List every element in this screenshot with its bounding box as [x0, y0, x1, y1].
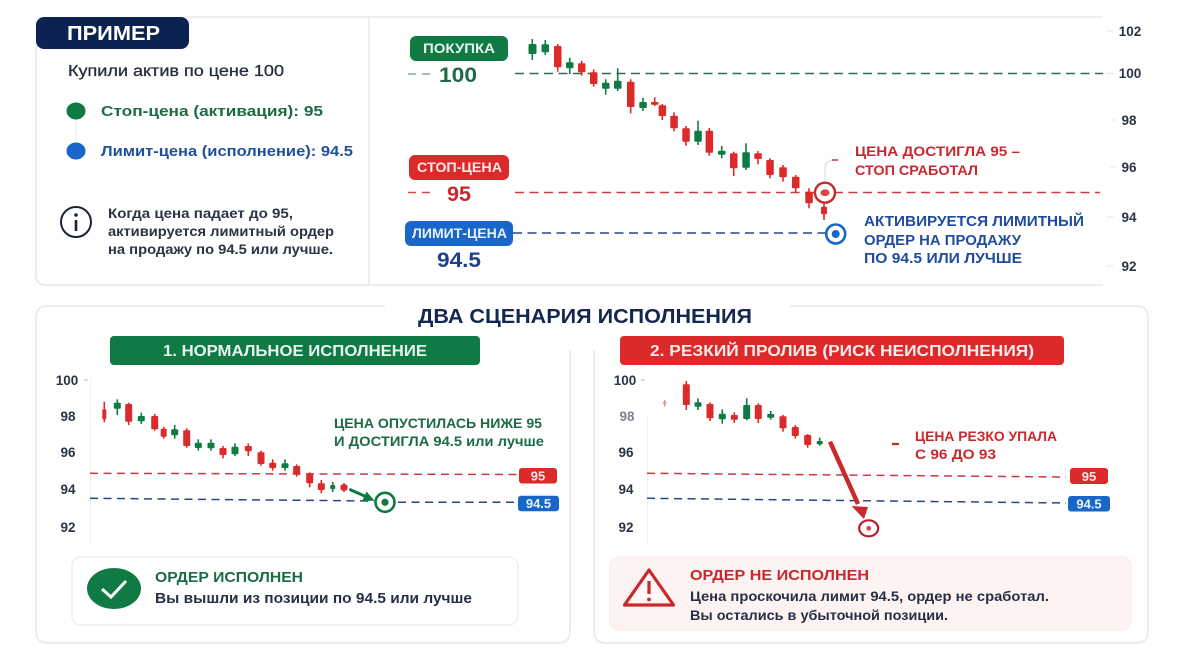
level lines — [647, 473, 1066, 503]
icon: check — [87, 568, 141, 609]
arrow: stop to limit — [821, 203, 827, 220]
label: buy: ПОКУПКА — [423, 41, 495, 56]
badge: scenario 1: 1. НОРМАЛЬНОЕ ИСПОЛНЕНИЕ — [163, 343, 427, 360]
price axis: 98 — [619, 409, 635, 424]
text: bought asset: Купили актив по цене 100 — [68, 63, 284, 80]
label: limit price — [405, 221, 513, 272]
marker: executed — [376, 493, 394, 512]
callout: sharp fall — [892, 429, 1057, 462]
price axis: 94 — [618, 482, 634, 497]
price axis: 92 — [60, 520, 76, 535]
panel: main chart — [369, 17, 1141, 285]
panel: two scenarios — [36, 302, 1148, 643]
callout: price fell: ЦЕНА ОПУСТИЛАСЬ НИЖЕ 95 — [334, 415, 542, 431]
icon: info — [61, 207, 91, 237]
tag: 95: 95 — [531, 468, 545, 484]
marker: gapped price — [859, 520, 878, 536]
marker: stop triggered — [815, 160, 838, 203]
candlesticks: main — [528, 39, 813, 208]
level lines — [513, 74, 1103, 233]
text: not executed message: Цена проскочила лимит 94.5, ордер не сработал. — [690, 588, 1049, 604]
callout: stop triggered: ЦЕНА ДОСТИГЛА 95 – — [855, 143, 1020, 159]
price axis: 96 — [1121, 160, 1137, 175]
tag: 95 — [519, 468, 557, 484]
price axis: 98 — [60, 409, 76, 424]
price axis: 94 — [1121, 210, 1137, 225]
text: info note: активируется лимитный ордер — [108, 224, 334, 239]
callout: sharp fall: С 96 ДО 93 — [915, 447, 997, 462]
price axis — [1106, 24, 1141, 274]
price axis: 92 — [1121, 259, 1137, 274]
arrow: to limit — [349, 489, 374, 502]
text: not executed message — [690, 567, 1049, 623]
candlesticks: scenario 1 — [102, 399, 348, 493]
callout: price fell — [334, 415, 544, 449]
callout: stop triggered: СТОП СРАБОТАЛ — [855, 162, 978, 178]
price axis: 96 — [60, 445, 76, 460]
price axis: 98 — [1121, 113, 1137, 128]
legend: limit price: Лимит-цена (исполнение): 94.5 — [101, 143, 354, 160]
price axis: 96 — [618, 445, 634, 460]
legend: stop price — [66, 102, 324, 141]
label: buy — [408, 36, 508, 87]
tag: 95 — [1070, 468, 1108, 484]
text: info note — [108, 206, 334, 257]
scenario 1: normal execution — [56, 336, 559, 625]
callout: price fell: И ДОСТИГЛА 94.5 или лучше — [334, 433, 544, 449]
tag: 95: 95 — [1082, 469, 1096, 484]
text: info note: Когда цена падает до 95, — [108, 206, 293, 221]
marker: limit order — [826, 224, 845, 244]
price axis: 100 — [56, 373, 78, 388]
badge: scenario 2: 2. РЕЗКИЙ ПРОЛИВ (РИСК НЕИСПОЛНЕНИЯ) — [650, 341, 1034, 360]
label: limit price: 94.5 — [437, 249, 481, 272]
price axis: 100 — [1119, 66, 1141, 81]
icon: warning — [624, 570, 674, 605]
price axis: 102 — [1119, 24, 1141, 39]
callout: limit activated: АКТИВИРУЕТСЯ ЛИМИТНЫЙ — [864, 212, 1084, 230]
callout: sharp fall: ЦЕНА РЕЗКО УПАЛА — [915, 429, 1057, 444]
label: stop price — [408, 155, 509, 206]
tag: 94.5: 94.5 — [526, 496, 551, 511]
price axis: 94 — [60, 482, 76, 497]
arrow: sharp drop — [830, 442, 868, 519]
text: not executed message: ОРДЕР НЕ ИСПОЛНЕН — [690, 567, 869, 584]
result: order not executed — [610, 557, 1131, 630]
label: stop price: СТОП-ЦЕНА — [417, 160, 502, 175]
heading: two scenarios: ДВА СЦЕНАРИЯ ИСПОЛНЕНИЯ — [418, 305, 752, 328]
callout: stop triggered — [855, 143, 1020, 178]
label: buy: 100 — [439, 64, 477, 87]
text: info note: на продажу по 94.5 или лучше. — [108, 242, 333, 257]
price axis: 92 — [618, 520, 634, 535]
badge: scenario 2 — [620, 336, 1064, 365]
text: executed message — [155, 569, 472, 607]
panel: example — [36, 17, 369, 285]
callout: limit activated — [864, 212, 1084, 267]
scenario 2: sharp drop — [610, 336, 1131, 630]
badge: scenario 1 — [110, 336, 480, 365]
price axis — [56, 373, 90, 545]
heading: two scenarios — [385, 302, 790, 330]
result: order executed — [72, 557, 518, 625]
tag: 94.5 — [518, 496, 559, 511]
text: not executed message: Вы остались в убыточной позиции. — [690, 607, 948, 623]
label: stop price: 95 — [447, 183, 471, 206]
candlesticks: scenario 2 — [663, 381, 823, 448]
legend: stop price: Стоп-цена (активация): 95 — [101, 103, 324, 120]
text: executed message: ОРДЕР ИСПОЛНЕН — [155, 569, 303, 586]
tag: 94.5: 94.5 — [1076, 496, 1102, 512]
heading: example: ПРИМЕР — [67, 22, 160, 45]
price axis: 100 — [614, 373, 636, 388]
label: limit price: ЛИМИТ-ЦЕНА — [412, 226, 507, 241]
tag: 94.5 — [1068, 496, 1110, 512]
callout: limit activated: ПО 94.5 ИЛИ ЛУЧШЕ — [864, 251, 1022, 267]
price axis — [614, 373, 648, 545]
text: executed message: Вы вышли из позиции по 94.5 или лучше — [155, 591, 472, 607]
callout: limit activated: ОРДЕР НА ПРОДАЖУ — [864, 233, 1022, 249]
heading: example — [36, 17, 189, 49]
level lines — [90, 473, 518, 502]
